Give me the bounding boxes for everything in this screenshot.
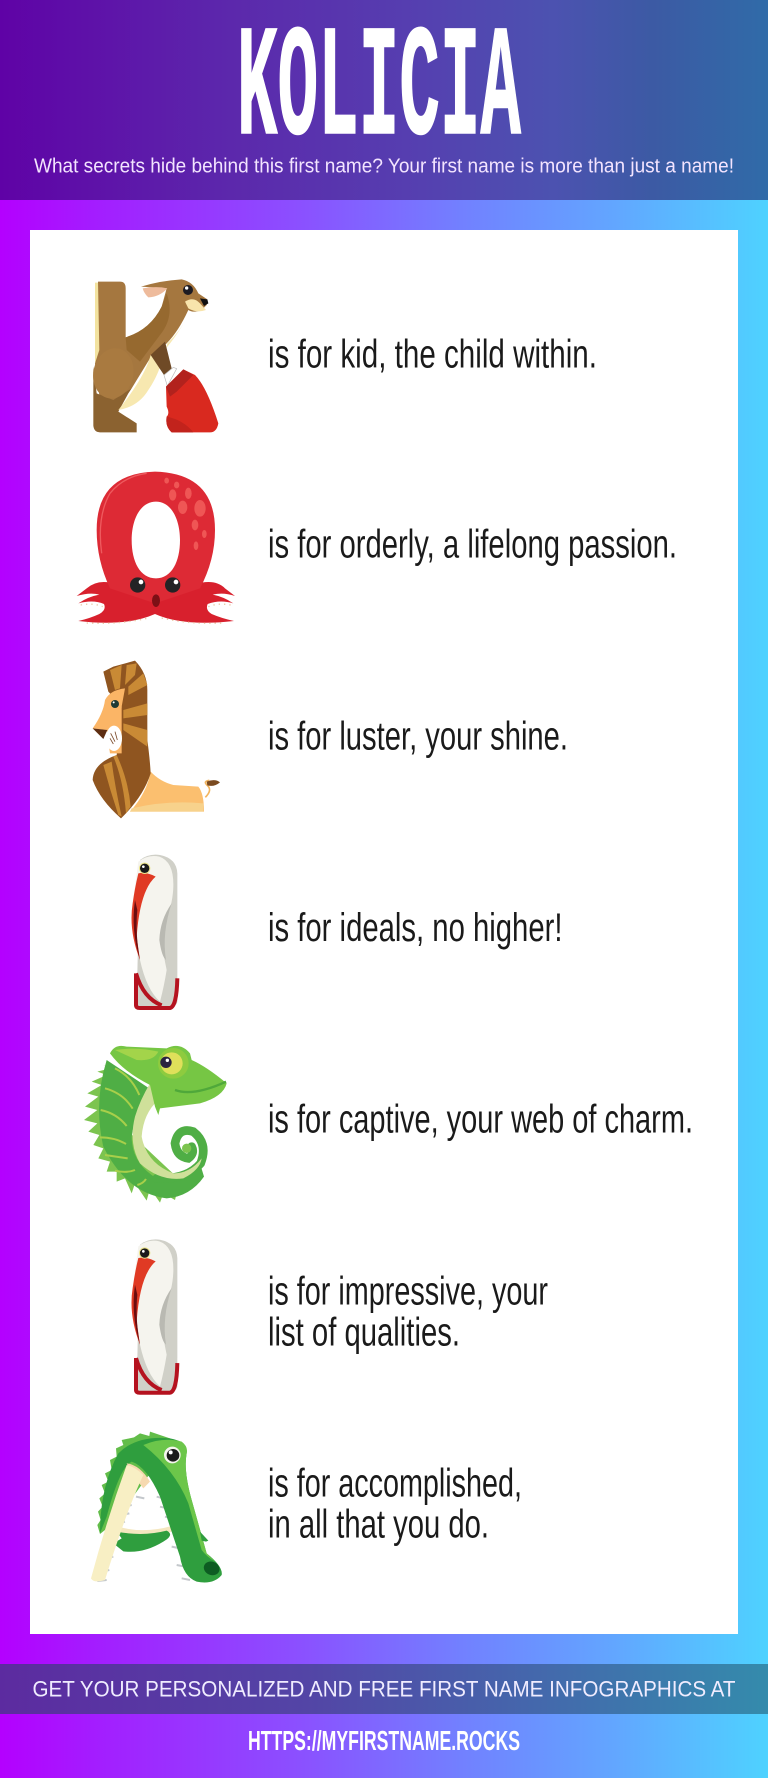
icon: stork letter I [131,855,177,1008]
row O [77,472,677,623]
row I second [131,1239,548,1393]
icon: stork letter I [131,1239,177,1393]
text: A lines: in all that you do. [268,1502,489,1546]
icon: alligator letter A [91,1432,222,1582]
row L [93,661,568,818]
footer text: GET YOUR PERSONALIZED AND FREE FIRST NAME INFOGRAPHICS AT [32,1677,736,1702]
footer band [0,1664,768,1714]
subtitle: What secrets hide behind this first name? Your first name is more than just a name! [34,156,734,178]
text: second I lines: is for impressive, your [268,1269,548,1313]
text: K line: is for kid, the child within. [268,333,597,377]
text: A lines [268,1462,522,1546]
icon: chameleon letter C [84,1046,227,1203]
icon: kangaroo letter K [89,279,218,432]
row C [84,1046,693,1203]
row K [89,279,597,432]
icon: lion letter L [93,661,220,818]
header band [0,0,768,200]
row A [91,1432,522,1582]
row I [131,855,562,1008]
footer url: HTTPS://MYFIRSTNAME.ROCKS [248,1725,520,1756]
text: A lines: is for accomplished, [268,1462,522,1506]
text: second I lines [268,1269,548,1355]
icon: octopus letter O [77,472,235,623]
text: I line: is for ideals, no higher! [268,906,562,950]
text: L line: is for luster, your shine. [268,714,568,758]
text: second I lines: list of qualities. [268,1311,460,1355]
panel: white letters card [30,230,738,1634]
